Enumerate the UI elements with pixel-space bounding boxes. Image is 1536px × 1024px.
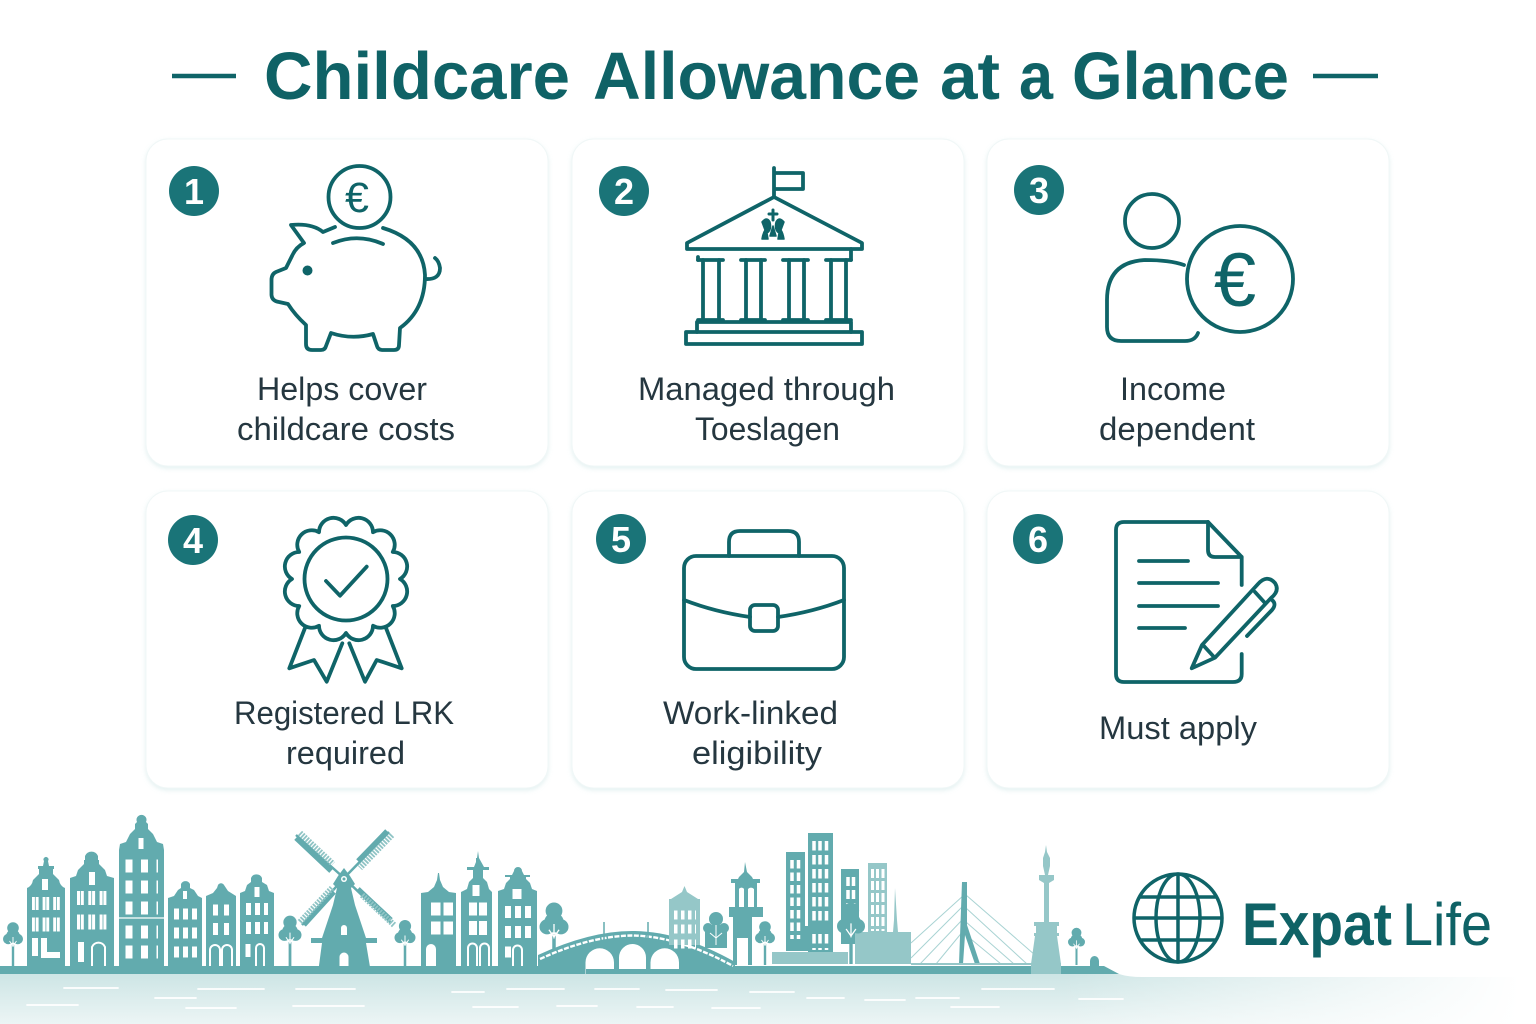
badge 5 xyxy=(596,514,646,564)
trees xyxy=(3,902,1085,966)
icon: government building with flag xyxy=(686,168,862,344)
label: Work-linked xyxy=(663,695,838,731)
label: childcare costs xyxy=(237,411,455,447)
modern towers xyxy=(772,833,911,964)
badge 3 xyxy=(1014,165,1064,215)
title: at xyxy=(940,39,1000,114)
wordmark xyxy=(1242,891,1492,958)
panel: must apply xyxy=(987,491,1389,788)
badge 6: 6 xyxy=(1028,519,1048,560)
canal houses right xyxy=(421,851,537,966)
label: dependent xyxy=(1099,411,1255,447)
icon: piggy bank with euro coin: € xyxy=(345,174,369,222)
arched bridge xyxy=(538,922,735,974)
label: Helps cover xyxy=(257,371,427,407)
icon: piggy bank with euro coin xyxy=(272,166,440,350)
water xyxy=(0,974,1536,1024)
panel: work-linked eligibility xyxy=(572,491,964,788)
title: Childcare xyxy=(264,39,570,114)
logo backdrop xyxy=(1119,974,1536,977)
title: a xyxy=(1019,39,1054,114)
wordmark: Life xyxy=(1402,891,1492,958)
badge 6 xyxy=(1013,514,1063,564)
windmill xyxy=(296,831,394,973)
harbour tower xyxy=(1031,845,1099,974)
label xyxy=(234,695,454,771)
icon: person with euro coin: € xyxy=(1214,238,1256,323)
badge 4: 4 xyxy=(183,520,203,561)
quay xyxy=(0,966,1119,974)
icon: briefcase xyxy=(684,531,844,669)
label xyxy=(1099,371,1255,447)
title xyxy=(172,39,1378,114)
label: Registered LRK xyxy=(234,695,454,731)
icon: document with pen xyxy=(1116,522,1277,682)
panel: registered LRK required xyxy=(146,491,548,788)
icon: person with euro coin xyxy=(1107,194,1293,341)
label: eligibility xyxy=(692,735,822,771)
badge 2: 2 xyxy=(614,171,634,212)
domed building xyxy=(669,886,729,948)
label: Managed through xyxy=(638,371,895,407)
icon: globe xyxy=(1134,874,1222,962)
badge 1 xyxy=(169,166,219,216)
title: Allowance xyxy=(593,39,920,114)
observation tower xyxy=(729,862,763,965)
icon: rosette with check mark xyxy=(285,518,407,682)
title: Glance xyxy=(1072,39,1289,114)
label xyxy=(663,695,838,771)
badge 3: 3 xyxy=(1029,170,1049,211)
label xyxy=(237,371,455,447)
panel: helps cover childcare costs xyxy=(146,139,548,466)
label: required xyxy=(286,735,405,771)
wordmark: Expat xyxy=(1242,891,1392,958)
badge 1: 1 xyxy=(184,171,204,212)
logo: ExpatLife xyxy=(1134,874,1492,962)
label: Toeslagen xyxy=(695,411,840,447)
label xyxy=(638,371,895,447)
canal houses left xyxy=(27,815,274,966)
panel: managed through Toeslagen xyxy=(572,139,964,466)
badge 2 xyxy=(599,166,649,216)
badge 5: 5 xyxy=(611,519,631,560)
panel: income dependent xyxy=(987,139,1389,466)
label: Must apply xyxy=(1099,710,1257,746)
skyline illustration xyxy=(0,815,1536,1024)
badge 4 xyxy=(168,515,218,565)
label: Income xyxy=(1120,371,1226,407)
cable-stayed bridge xyxy=(911,882,1061,965)
